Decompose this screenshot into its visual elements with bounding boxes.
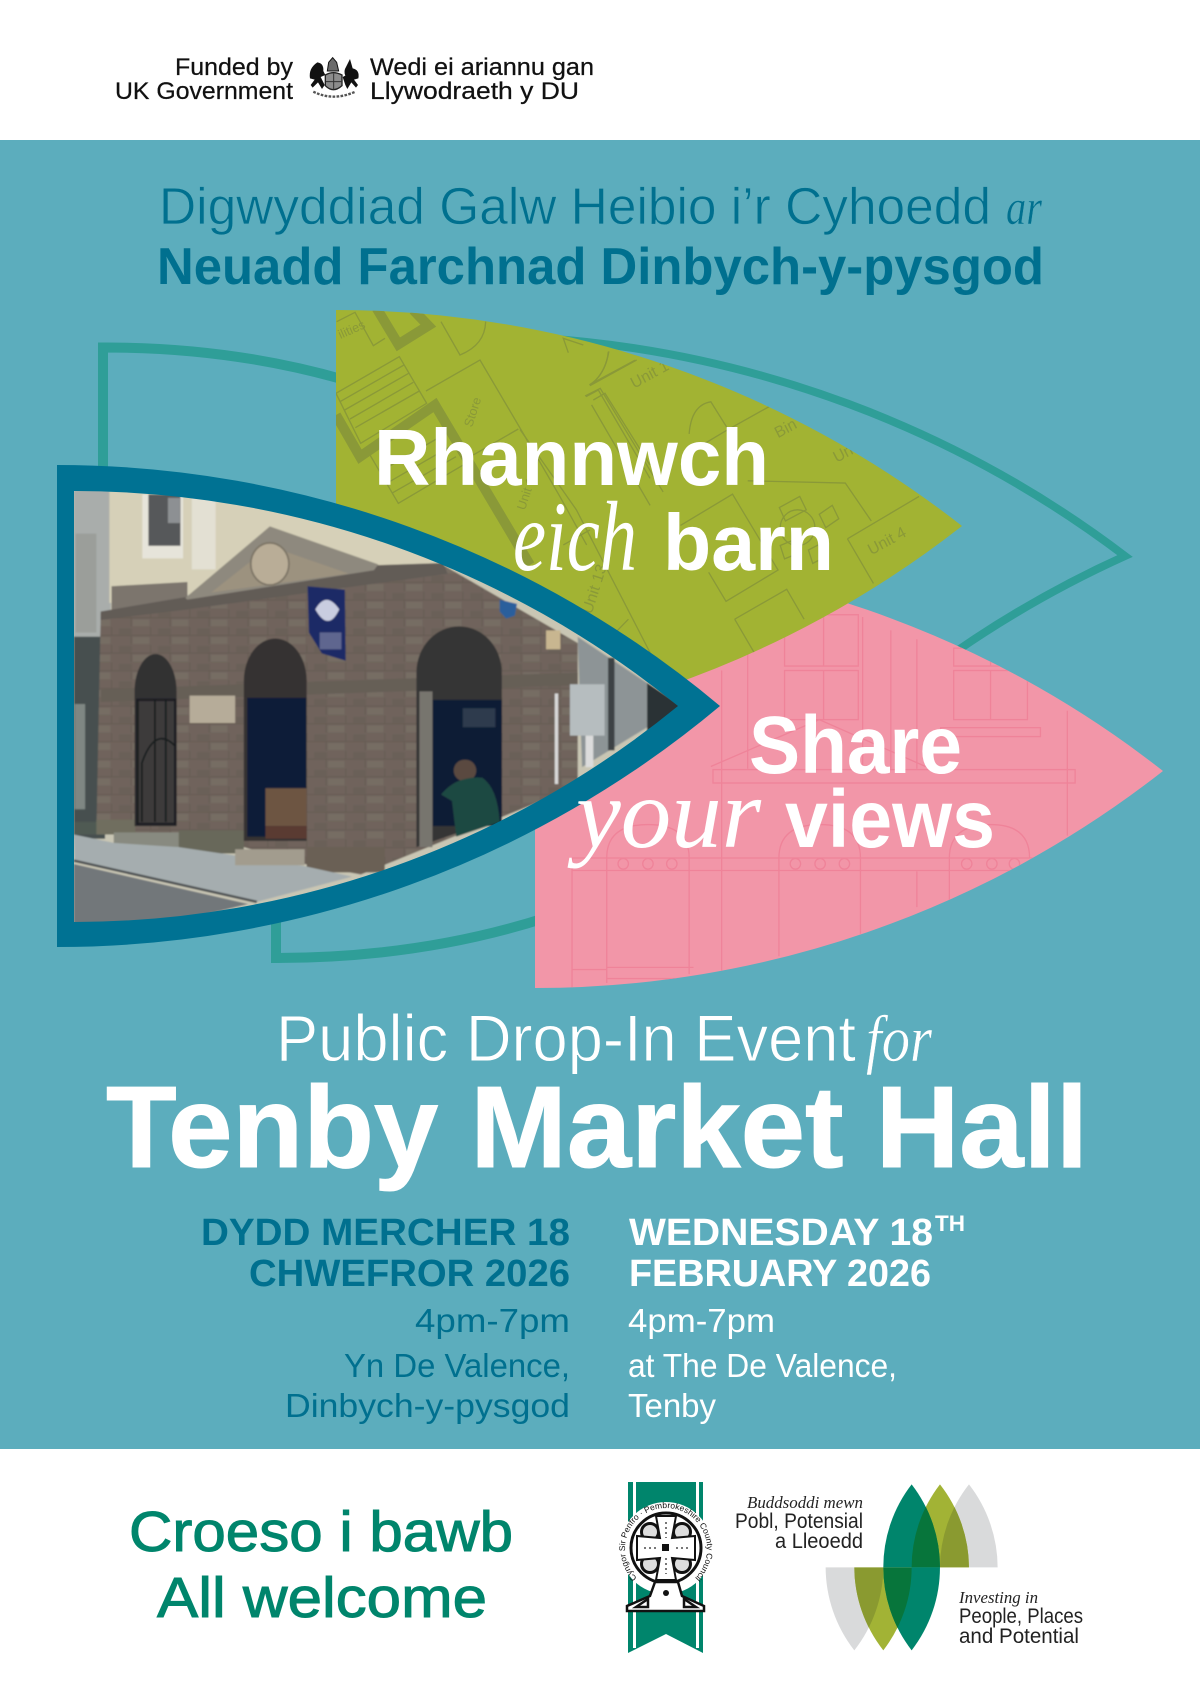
- logo text, English: Investing in: [958, 1588, 1038, 1607]
- logo text, Welsh: Buddsoddi mewn: [747, 1493, 863, 1512]
- slogan: Share your views: views: [785, 774, 995, 865]
- heading line: Neuadd Farchnad: Neuadd Farchnad Dinbych-y-pysgod: [157, 238, 1044, 296]
- logo text, Welsh: a Lleoedd: [775, 1530, 863, 1553]
- slogan: Rhannwch eich barn: barn: [663, 498, 834, 587]
- pink arrow panel with building elevation: [535, 604, 1163, 988]
- funded by, English: UK Government: [115, 78, 293, 105]
- neighbouring buildings: [74, 491, 111, 642]
- icon: royal coat of arms: [310, 58, 359, 97]
- olive arrow panel with floor plan: [336, 310, 962, 680]
- event details, English: TH: [935, 1211, 965, 1236]
- person: [454, 760, 476, 781]
- street: [74, 835, 352, 902]
- outline arrow shapes: [103, 338, 1125, 958]
- event details, Welsh: DYDD MERCHER 18: [201, 1212, 570, 1254]
- funding strip: UK Government: [115, 54, 594, 105]
- heading line: Digwyddiad Galw Heibio: Digwyddiad Galw Heibio i’r Cyhoedd: [159, 178, 991, 236]
- floor plan, left part: Unit 1: [514, 476, 538, 512]
- logo: Pembrokeshire County Council: [619, 1482, 712, 1653]
- event details, Welsh: Dinbych-y-pysgod: [285, 1387, 570, 1424]
- welcome message: All welcome: [157, 1566, 487, 1630]
- floor plan, right part: Unit 13: [579, 562, 611, 616]
- heading line: Digwyddiad Galw Heibio: ar: [1006, 179, 1042, 235]
- floor plan, right part: Unit 4: [865, 524, 909, 559]
- event details, English: at The De Valence,: [628, 1347, 897, 1384]
- floor plan, left part: ilities: [336, 318, 367, 342]
- event details, English: Tenby: [628, 1387, 716, 1424]
- event details, Welsh: [201, 1212, 570, 1424]
- funded by, Welsh: [370, 54, 594, 105]
- slogan: Share your views: [567, 700, 995, 869]
- main title: Tenby Market Hall: Tenby Market Hall: [106, 1062, 1088, 1192]
- teal background panel: [0, 140, 1200, 1449]
- logo: Investing in People, Places and Potential: [735, 1484, 1083, 1650]
- logo text, English: [958, 1588, 1083, 1648]
- floor plan, left part: [336, 308, 650, 565]
- floor plan, left part: Store: [462, 396, 484, 429]
- event details, English: FEBRUARY 2026: [629, 1253, 931, 1295]
- logo text, Welsh: [735, 1493, 863, 1553]
- arched doorways: [135, 654, 177, 826]
- slogan: Rhannwch eich barn: [374, 413, 834, 592]
- Welsh heading: [157, 178, 1044, 296]
- logo text, Welsh: Pobl, Potensial: [735, 1510, 863, 1533]
- event details, English: WEDNESDAY 18: [629, 1212, 933, 1254]
- welcome message: Croeso i bawb: [129, 1500, 513, 1564]
- event details, English: 4pm-7pm: [628, 1302, 775, 1339]
- English heading: [106, 1001, 1088, 1192]
- welcome message: [129, 1500, 513, 1630]
- funded by, Welsh: Wedi ei ariannu gan: [370, 54, 594, 81]
- funded by, English: Funded by: [175, 54, 293, 81]
- event details, Welsh: Yn De Valence,: [344, 1347, 570, 1384]
- floor plan, right part: Bin: [772, 416, 800, 442]
- floor plan, right part: Unit 1: [628, 357, 672, 392]
- stone facade: [96, 565, 578, 875]
- event details, English: [628, 1211, 965, 1424]
- logo text, English: and Potential: [959, 1625, 1079, 1648]
- slogan: Rhannwch eich barn: Rhannwch: [374, 413, 769, 502]
- funded by, English: [115, 54, 293, 105]
- floor plan, right part: Unit: [831, 438, 863, 467]
- event details, Welsh: CHWEFROR 2026: [249, 1253, 570, 1295]
- heading line: Public Drop-In Event: Public Drop-In Event: [276, 1001, 856, 1075]
- slogan: Rhannwch eich barn: eich: [513, 481, 637, 592]
- slogan: Share your views: your: [567, 758, 762, 869]
- icon: overlapping leaves: [826, 1484, 998, 1650]
- right-hand wall: [577, 636, 648, 768]
- event details, Welsh: 4pm-7pm: [415, 1302, 570, 1339]
- logo text, English: People, Places: [959, 1605, 1083, 1628]
- plaque: [190, 696, 235, 723]
- floor plan, right part: [520, 351, 919, 653]
- heading line: Public Drop-In Event: for: [866, 1003, 932, 1076]
- slogan: Share your views: Share: [749, 700, 962, 791]
- logo: Pembrokeshire County Council: Cyngor Sir Penfro · Pembrokeshire County Council: [619, 1502, 712, 1582]
- photo arrow: Tenby Market Hall photograph: [57, 465, 720, 947]
- funded by, Welsh: Llywodraeth y DU: [370, 78, 579, 105]
- flag: [308, 586, 346, 661]
